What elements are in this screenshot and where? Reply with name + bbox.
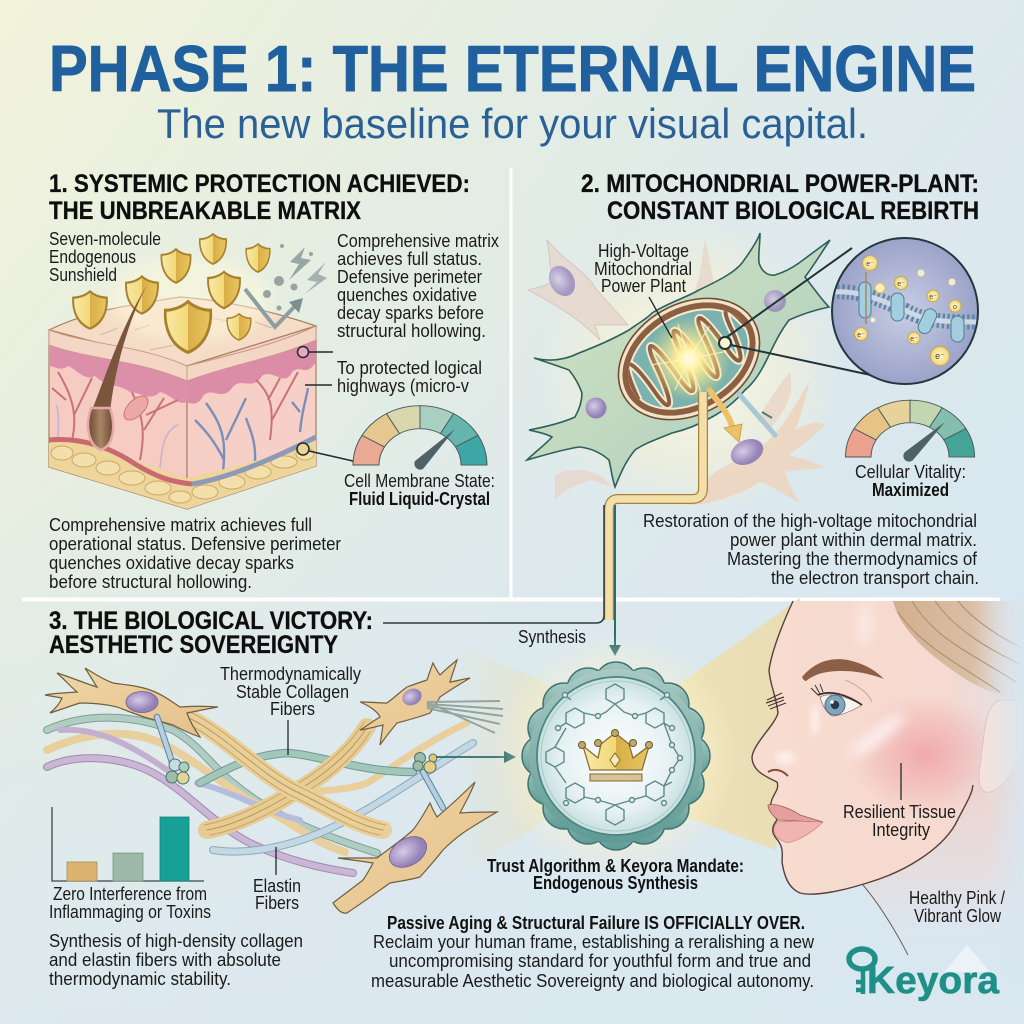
text: matrix description right: quenches oxidative xyxy=(337,285,477,305)
label: mitochondrial power plant: Power Plant xyxy=(601,276,686,296)
text: section 3 body xyxy=(49,931,303,989)
heading: section 2 xyxy=(581,170,979,225)
text: section 2 body: Mastering the thermodynamics of xyxy=(727,549,978,569)
label: healthy glow xyxy=(909,888,1005,926)
panel: section 3 biological victory xyxy=(45,392,1024,1002)
callout: electron transport chain lens: e⁻ xyxy=(910,336,918,343)
text: matrix description right: Comprehensive matrix xyxy=(337,231,499,251)
label: mitochondrial power plant: High-Voltage xyxy=(598,241,689,261)
label: sunshield: Seven-molecule xyxy=(49,229,161,249)
callout: electron transport chain lens: e⁻ xyxy=(857,332,865,339)
callout markers xyxy=(297,346,353,461)
label: mitochondrial power plant xyxy=(594,241,692,338)
gauge label: membrane state xyxy=(344,471,495,509)
logo: Keyora: Keyora xyxy=(867,960,1000,1002)
text: micro-vessel callout xyxy=(337,358,482,396)
panel: section 1 systemic protection xyxy=(49,170,499,592)
label: elastin fibers: Elastin xyxy=(253,876,301,896)
text: section 1 body: operational status. Defensive perimeter xyxy=(49,534,341,554)
chart caption: Zero Interference from xyxy=(53,884,207,904)
icon: oxidative sparks deflected xyxy=(245,244,327,327)
callout: electron transport chain lens: e⁻ xyxy=(866,261,874,268)
label: mitochondrial power plant: Mitochondrial xyxy=(594,259,692,279)
text: matrix description right: Defensive perimeter xyxy=(337,267,482,287)
gauge label: vitality: Maximized xyxy=(872,480,949,500)
label: elastin fibers: Fibers xyxy=(255,893,299,913)
arrow: energy to next cell xyxy=(708,388,742,442)
bar chart: zero interference xyxy=(52,807,204,881)
illustration: cell nuclei xyxy=(586,290,786,470)
text: matrix description right: achieves full status. xyxy=(337,249,482,269)
label: sunshield xyxy=(49,229,161,285)
label: resilient tissue: Integrity xyxy=(872,820,930,840)
text: section 1 body: before structural hollowing. xyxy=(49,572,252,592)
text: victory statement: Passive Aging & Structural Failure IS OFFICIALLY OVER. xyxy=(387,913,805,933)
text: matrix description right: decay sparks before xyxy=(337,303,484,323)
illustration: skin cross-section block xyxy=(49,297,316,509)
illustration: collagen and elastin fibers xyxy=(47,712,473,873)
connector: energy path to section 3 xyxy=(383,392,703,656)
label: sunshield: Sunshield xyxy=(49,265,117,285)
callout: electron transport chain lens: e⁻ xyxy=(897,281,905,288)
chart caption xyxy=(49,884,211,922)
chart caption: Inflammaging or Toxins xyxy=(49,902,211,922)
text: section 1 body: quenches oxidative decay sparks xyxy=(49,553,294,573)
text: section 2 body: power plant within dermal matrix. xyxy=(730,530,977,550)
text: section 3 body: and elastin fibers with absolute xyxy=(49,950,281,970)
illustration: face profile xyxy=(752,601,1024,981)
heading: section 3: 3. THE BIOLOGICAL VICTORY: xyxy=(49,607,373,635)
text: victory statement xyxy=(371,913,815,991)
gauge label: vitality xyxy=(855,462,966,500)
illustration: fibroblast bottom right xyxy=(333,782,497,913)
text: victory statement: Reclaim your human frame, establishing a reralishing a new xyxy=(373,932,815,952)
text: matrix description right xyxy=(337,231,499,341)
arrow: transfer stick to neighbouring cell xyxy=(739,394,775,435)
heading: section 3: AESTHETIC SOVEREIGNTY xyxy=(49,631,338,659)
seal: trust algorithm crown xyxy=(494,634,738,878)
text: section 2 body: Restoration of the high-voltage mitochondrial xyxy=(643,511,977,531)
callout: electron transport chain lens: e⁻ xyxy=(929,294,937,301)
heading: section 2: 2. MITOCHONDRIAL POWER-PLANT: xyxy=(581,170,979,198)
gauge: cellular vitality xyxy=(845,394,982,467)
label: resilient tissue: Resilient Tissue xyxy=(843,802,956,822)
heading: section 1: THE UNBREAKABLE MATRIX xyxy=(49,197,361,225)
seal label: Endogenous Synthesis xyxy=(533,873,698,893)
text: section 3 body: Synthesis of high-density collagen xyxy=(49,931,303,951)
warm glow behind cells xyxy=(540,220,840,520)
heading: section 1: 1. SYSTEMIC PROTECTION ACHIEVED: xyxy=(49,170,470,198)
illustration: background cells xyxy=(528,237,825,505)
arrow: fibers to seal xyxy=(436,751,516,763)
text: matrix description right: structural hollowing. xyxy=(337,321,486,341)
text: section 1 body xyxy=(49,515,341,592)
text: micro-vessel callout: To protected logical xyxy=(337,358,482,378)
text: section 3 body: thermodynamic stability. xyxy=(49,969,231,989)
callout lines to zoom lens xyxy=(719,248,880,377)
label: sunshield: Endogenous xyxy=(49,247,136,267)
label: collagen fibers: Thermodynamically xyxy=(220,664,361,684)
heading: section 1 xyxy=(49,170,470,225)
label: elastin fibers xyxy=(253,847,301,913)
logo: Keyora xyxy=(849,945,1000,1002)
illustration: fibroblast top left xyxy=(45,668,218,737)
text: victory statement: uncompromising standard for youthful form and true and xyxy=(389,951,811,971)
icons: golden shields xyxy=(73,234,270,352)
subtitle: The new baseline for your visual capital. xyxy=(157,100,868,147)
illustration: enzyme complexes xyxy=(157,717,443,808)
text: section 2 body: the electron transport chain. xyxy=(771,568,979,588)
callout: electron transport chain lens: e⁻ xyxy=(935,351,945,361)
text: section 2 body xyxy=(643,511,979,588)
heading: section 2: CONSTANT BIOLOGICAL REBIRTH xyxy=(607,197,979,225)
illustration: main cell xyxy=(527,233,830,487)
gauge label: vitality: Cellular Vitality: xyxy=(855,462,966,482)
label: healthy glow: Healthy Pink / xyxy=(909,888,1005,908)
label: resilient tissue xyxy=(843,763,956,840)
text: section 1 body: Comprehensive matrix achieves full xyxy=(49,515,312,535)
light beams behind seal xyxy=(450,598,800,880)
gauge label: membrane state: Cell Membrane State: xyxy=(344,471,495,491)
label: synthesis: Synthesis xyxy=(518,627,586,647)
callout: electron transport chain lens xyxy=(832,238,980,384)
heading: section 3 xyxy=(49,607,373,659)
illustration: hair follicle xyxy=(88,285,147,450)
illustration: fibroblast top right xyxy=(360,660,503,745)
panel: section 2 mitochondrial power plant xyxy=(527,170,982,588)
label: healthy glow: Vibrant Glow xyxy=(914,906,1002,926)
label: collagen fibers: Fibers xyxy=(270,699,315,719)
gauge: cell membrane state xyxy=(353,399,495,475)
callout: electron transport chain lens: o xyxy=(953,304,957,311)
label: collagen fibers: Stable Collagen xyxy=(236,682,349,702)
text: victory statement: measurable Aesthetic Sovereignty and biological autonomy. xyxy=(371,971,814,991)
label: collagen fibers xyxy=(220,664,361,755)
illustration: mitochondrion xyxy=(618,298,760,420)
seal label: Trust Algorithm & Keyora Mandate: xyxy=(487,856,744,876)
seal label xyxy=(487,856,744,893)
text: micro-vessel callout: highways (micro-v xyxy=(337,376,469,396)
gauge label: membrane state: Fluid Liquid-Crystal xyxy=(349,489,490,509)
